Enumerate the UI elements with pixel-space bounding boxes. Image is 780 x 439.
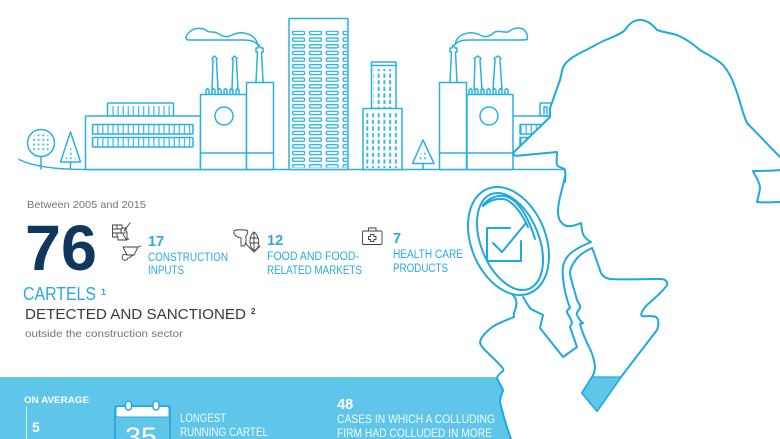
stat: 12 food and food-related markets: RELATED MARKETS [267, 265, 362, 277]
on average divider and five [26, 407, 40, 439]
longest running cartel: LONGEST [180, 413, 226, 425]
ground line [19, 160, 566, 170]
outer rim [453, 175, 564, 307]
stat: 7 health care products [393, 231, 463, 275]
left factory with chimneys [186, 28, 274, 170]
face and chin outline [523, 176, 591, 357]
48 repeat cases [337, 397, 495, 439]
right low factory hall [513, 103, 554, 147]
magnifying glass [453, 175, 564, 307]
icon: first aid kit [362, 228, 382, 244]
city skyline illustration [19, 18, 566, 170]
stat: 7 health care products: HEALTH CARE [393, 249, 463, 261]
on average label: ON AVERAGE [24, 395, 89, 406]
stat: 7 health care products: PRODUCTS [393, 263, 448, 275]
on average divider and five: 5 [32, 419, 40, 435]
round tree [28, 130, 54, 169]
hat back flap [753, 170, 780, 202]
intro date line: Between 2005 and 2015 [27, 199, 146, 211]
left low factory hall [86, 103, 200, 170]
detected and sanctioned: DETECTED AND SANCTIONED [25, 306, 246, 323]
48 repeat cases: 48 [337, 397, 353, 413]
tall central tower [289, 18, 348, 170]
icon: check box [487, 228, 521, 261]
48 repeat cases: CASES IN WHICH A COLLUDING [337, 414, 495, 426]
stat: 12 food and food-related markets: FOOD AND FOOD- [267, 251, 359, 263]
icon: bread and corn [234, 230, 260, 252]
detective hat [513, 20, 780, 182]
cartels label: CARTELS [23, 284, 96, 304]
triangular tree left [60, 132, 80, 169]
blue statistics band [0, 377, 510, 439]
longest running cartel: RUNNING CARTEL [180, 427, 269, 439]
stat: 17 construction inputs: CONSTRUCTION [148, 252, 228, 264]
stat: 17 construction inputs: 17 [148, 234, 164, 250]
right smoke cloud [455, 28, 527, 45]
big number 76: 76 [25, 212, 97, 284]
triangular tree right [412, 140, 434, 169]
cartels label: 1 [101, 287, 106, 297]
left smoke cloud [186, 28, 258, 45]
scope note: outside the construction sector [25, 328, 184, 340]
inner rim [464, 183, 556, 300]
stat: 17 construction inputs: INPUTS [148, 265, 184, 277]
stat: 7 health care products: 7 [393, 231, 401, 247]
detective silhouette [480, 20, 780, 439]
stat: 12 food and food-related markets: 12 [267, 233, 283, 249]
icon: calendar 35 [115, 401, 170, 439]
neck and cheek outline [570, 248, 667, 411]
detected and sanctioned: 2 [251, 307, 256, 316]
check mark [493, 223, 526, 252]
icon: construction wall and wheelbarrow [112, 223, 141, 260]
blue fill below the collar [582, 377, 621, 411]
lens highlights [483, 196, 535, 239]
magnifying glass handle and arm [480, 295, 516, 439]
right factory with chimneys [440, 28, 527, 170]
stat: 17 construction inputs [148, 234, 228, 277]
second tower [363, 62, 402, 170]
stat: 12 food and food-related markets [267, 233, 362, 277]
